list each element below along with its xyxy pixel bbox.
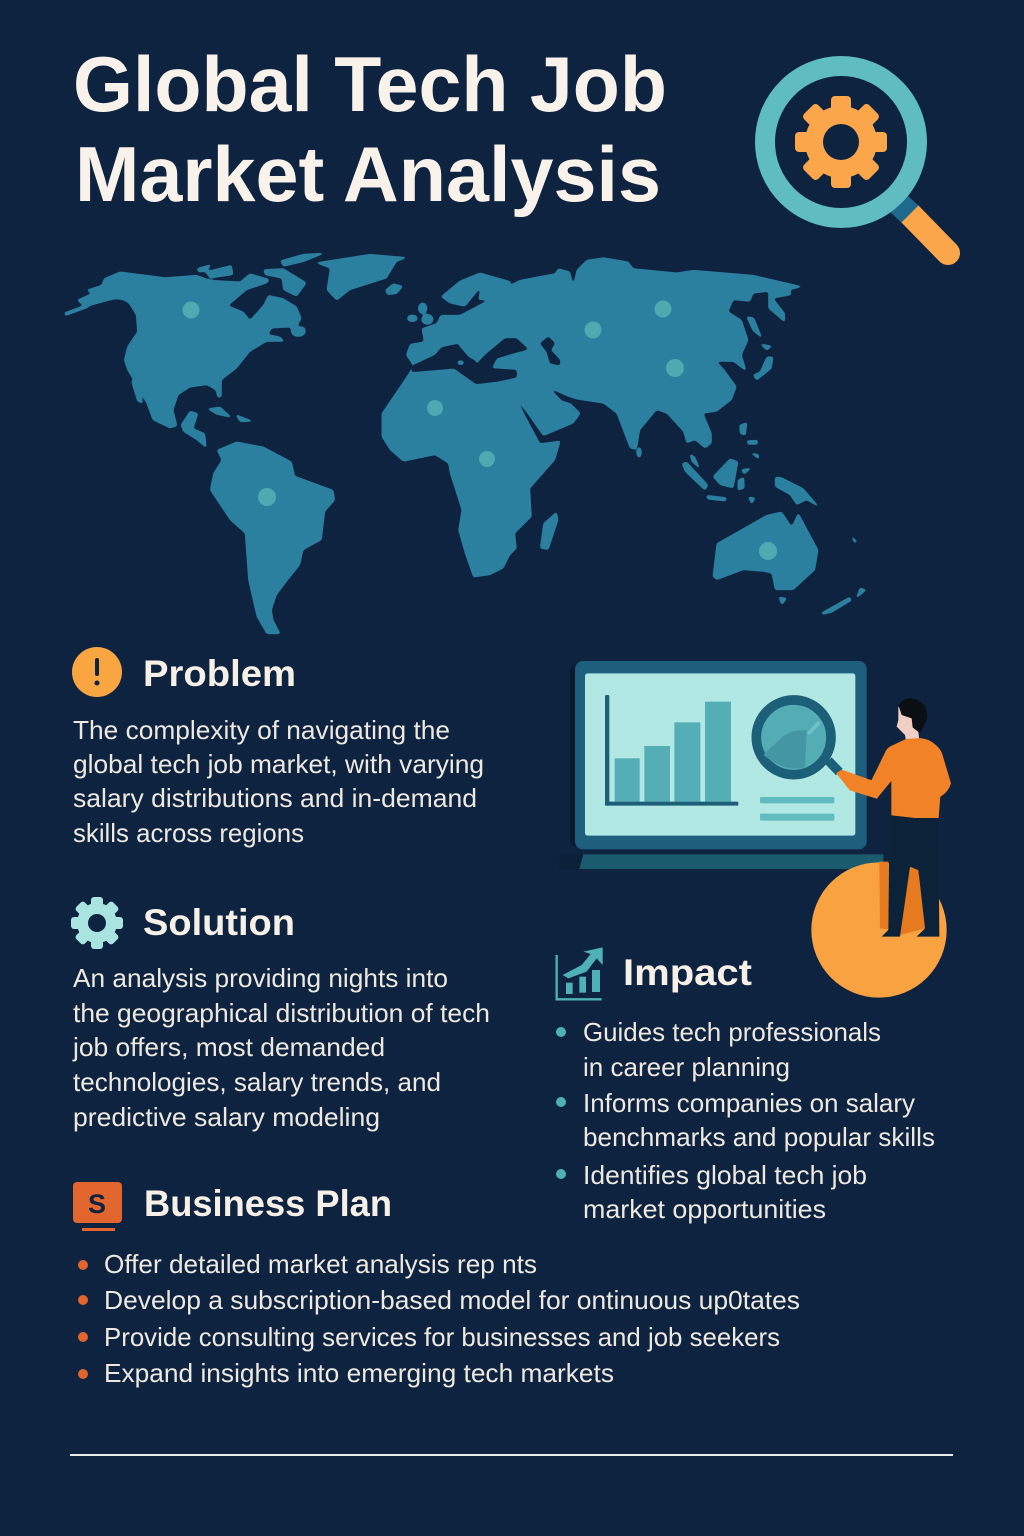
- problem text: [73, 715, 484, 848]
- problem text: salary distributions and in-demand: [73, 783, 477, 813]
- impact list: Informs companies on salary: [583, 1088, 915, 1118]
- icon: warning: [72, 647, 122, 697]
- problem text: global tech job market, with varying: [73, 749, 484, 779]
- orange circle: [811, 862, 947, 998]
- illustration: analyst at monitor: [559, 661, 951, 998]
- continents: [64, 253, 803, 634]
- americas and greenland: [64, 253, 408, 634]
- world map: [64, 253, 867, 634]
- person: [837, 698, 951, 937]
- title: [73, 40, 667, 218]
- business plan list: Offer detailed market analysis rep nts: [104, 1249, 537, 1279]
- icon: business plan screen: [73, 1182, 122, 1231]
- bar chart: [605, 695, 738, 806]
- solution text: technologies, salary trends, and: [73, 1067, 441, 1097]
- heading: business plan: Business Plan: [144, 1183, 392, 1224]
- eurasia and africa: [382, 257, 803, 577]
- business plan list: [78, 1249, 800, 1388]
- problem text: The complexity of navigating the: [73, 715, 450, 745]
- icon: business plan screen: S: [88, 1189, 106, 1219]
- map location dots: [182, 300, 777, 560]
- heading: solution: Solution: [143, 902, 295, 943]
- monitor stand: [559, 854, 883, 869]
- problem text: skills across regions: [73, 818, 304, 848]
- panel: business plan: [73, 1182, 800, 1388]
- title: Market Analysis: [75, 130, 661, 218]
- panel: solution: [71, 897, 490, 1132]
- heading: impact: Impact: [623, 952, 752, 993]
- solution text: job offers, most demanded: [72, 1032, 385, 1062]
- business plan list: Provide consulting services for businesses and job seekers: [104, 1322, 780, 1352]
- impact list: Identifies global tech job: [583, 1160, 867, 1190]
- business plan list: Expand insights into emerging tech markets: [104, 1358, 614, 1388]
- panel: impact: [556, 947, 935, 1224]
- monitor: [570, 661, 867, 849]
- solution text: predictive salary modeling: [73, 1102, 380, 1132]
- solution text: the geographical distribution of tech: [73, 998, 490, 1028]
- solution text: [72, 963, 490, 1132]
- impact list: market opportunities: [583, 1194, 826, 1224]
- screen magnifier: [756, 700, 839, 775]
- icon: magnifying glass with gear: [765, 66, 960, 265]
- text lines on screen: [760, 797, 834, 821]
- panel: problem: [72, 647, 484, 848]
- business plan list: Develop a subscription-based model for ontinuous up0tates: [104, 1285, 800, 1315]
- icon: growth chart: [557, 947, 603, 999]
- heading: problem: Problem: [143, 653, 296, 694]
- impact list: Guides tech professionals: [583, 1017, 881, 1047]
- impact list: [556, 1017, 935, 1224]
- islands: [407, 303, 867, 615]
- title: Global Tech Job: [73, 40, 667, 128]
- impact list: in career planning: [583, 1052, 790, 1082]
- solution text: An analysis providing nights into: [73, 963, 448, 993]
- icon: gear: [71, 897, 123, 949]
- seas: [412, 337, 560, 384]
- impact list: benchmarks and popular skills: [583, 1122, 935, 1152]
